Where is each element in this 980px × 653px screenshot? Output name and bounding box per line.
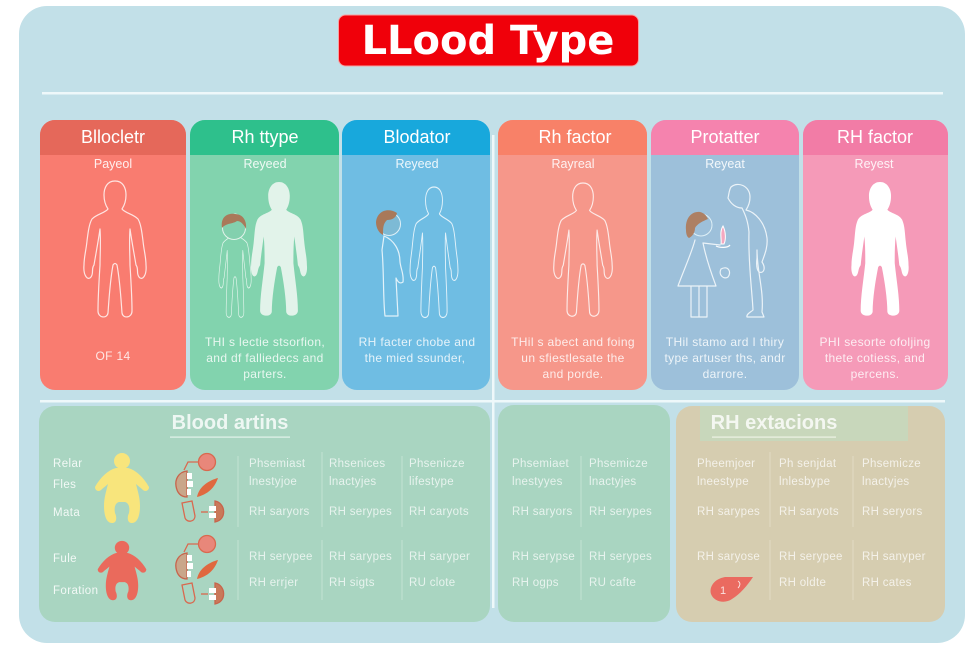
row labels: Foration xyxy=(53,585,98,597)
panel: Rh ttype card: Rh ttype xyxy=(231,127,299,147)
panel: RH factor card: Reyest xyxy=(855,157,894,171)
panel: RH factor card xyxy=(803,120,948,390)
panel: middle table xyxy=(498,405,670,622)
icon: man side view xyxy=(728,184,767,317)
icon: child figure xyxy=(219,214,251,317)
panel: RH factor card: percens. xyxy=(851,367,899,381)
panel: Rh factor card: un sfiestlesate the xyxy=(521,351,625,365)
icon: body outline xyxy=(554,183,612,316)
icon: girl holding flower xyxy=(678,212,730,317)
table text: lnactyjes xyxy=(329,476,376,488)
table text: RH sigts xyxy=(329,577,375,589)
panel: Blood artins xyxy=(39,406,490,622)
panel: middle table: RH serypse xyxy=(512,551,575,563)
panel: Rh factor card: THil s abect and foing xyxy=(511,335,635,349)
panel: Bllocletr card: OF 14 xyxy=(95,349,131,363)
panel: RH extacions: RH saryots xyxy=(779,506,839,518)
panel: Protatter card xyxy=(651,120,799,390)
table text: RU clote xyxy=(409,577,456,589)
panel: Rh ttype card: and df falliedecs and xyxy=(206,351,324,365)
table text: Rhsenices xyxy=(329,458,385,470)
table text: RH sarypes xyxy=(329,551,392,563)
panel: Rh factor card: and porde. xyxy=(543,367,603,381)
panel: RH extacions: lnactyjes xyxy=(862,476,909,488)
panel: RH extacions: RH cates xyxy=(862,577,912,589)
panel: middle table: RH ogps xyxy=(512,577,559,589)
table text: Phsemiast xyxy=(249,458,306,470)
panel: Bllocletr card: Payeol xyxy=(94,157,132,171)
panel: RH extacions: Ph senjdat xyxy=(779,458,837,470)
panel: RH extacions: RH sarypes xyxy=(697,506,760,518)
panel: middle table: RU cafte xyxy=(589,577,636,589)
panel: RH factor card: PHI sesorte ofoljing xyxy=(819,335,931,349)
panel: middle table: RH serypes xyxy=(589,551,652,563)
panel: Blodator card: Reyeed xyxy=(395,157,439,171)
table text xyxy=(249,458,470,589)
panel: Protatter card: Protatter xyxy=(690,127,760,147)
panel: Protatter card: Reyeat xyxy=(705,157,745,171)
icon: red baby xyxy=(98,541,146,600)
row labels: Mata xyxy=(53,507,80,519)
panel: Protatter card: darrore. xyxy=(703,367,747,381)
panel: Rh factor card xyxy=(498,120,647,390)
panel: middle table: RH saryors xyxy=(512,506,573,518)
panel: Rh factor card: Rh factor xyxy=(538,127,612,147)
panel: Rh ttype card: Reyeed xyxy=(243,157,287,171)
icon: child side view xyxy=(376,210,403,316)
panel: RH extacions: RH saryose xyxy=(697,551,760,563)
panel: Blodator card xyxy=(342,120,490,390)
icon: white silhouette xyxy=(851,182,909,316)
panel: RH extacions: RH extacions xyxy=(711,412,837,434)
panel: RH factor card: RH factor xyxy=(837,127,913,147)
table text: RH saryper xyxy=(409,551,470,563)
panel: RH factor card: thete cotiess, and xyxy=(825,351,925,365)
panel: RH extacions: lneestype xyxy=(697,476,749,488)
panel: Protatter card: THil stamo ard I thiry xyxy=(666,335,784,349)
icon: red drop: 1 xyxy=(720,585,726,597)
row labels: Fles xyxy=(53,479,76,491)
table text: RH errjer xyxy=(249,577,298,589)
panel: RH extacions: Phsemicze xyxy=(862,458,921,470)
table text: RH serypes xyxy=(329,506,392,518)
panel: Rh ttype card xyxy=(190,120,339,390)
row labels: Relar xyxy=(53,458,82,470)
panel: RH extacions: RH serypee xyxy=(779,551,843,563)
panel: Blodator card: the mied ssunder, xyxy=(365,351,465,365)
table text: lifestype xyxy=(409,476,454,488)
table text: Phsenicze xyxy=(409,458,465,470)
panel: RH extacions: Pheemjoer xyxy=(697,458,755,470)
panel: Blodator card: RH facter chobe and xyxy=(359,335,475,349)
panel: Bllocletr card xyxy=(40,120,186,390)
icon: adult silhouette xyxy=(251,182,307,316)
table text: RH serypee xyxy=(249,551,313,563)
panel: middle table: Phsemicze xyxy=(589,458,648,470)
icon: adult outline xyxy=(410,187,458,318)
icon: yellow baby xyxy=(95,453,149,523)
panel: RH extacions: RH seryors xyxy=(862,506,923,518)
panel: RH extacions: lnlesbype xyxy=(779,476,830,488)
icon: organs lower xyxy=(176,536,224,604)
title banner: LLood Type xyxy=(362,18,614,64)
row labels xyxy=(53,458,98,597)
panel: Bllocletr card: Bllocletr xyxy=(81,127,145,147)
panel: middle table: lnestyyes xyxy=(512,476,563,488)
icon: organs upper xyxy=(176,454,224,522)
panel: Blodator card: Blodator xyxy=(383,127,451,147)
panel: Rh ttype card: parters. xyxy=(243,367,287,381)
panel: RH extacions xyxy=(676,406,945,622)
table text: lnestyjoe xyxy=(249,476,297,488)
table text: RH caryots xyxy=(409,506,469,518)
panel: Rh ttype card: THI s lectie stsorfion, xyxy=(205,335,325,349)
icon: red drop xyxy=(711,577,753,602)
panel: RH extacions: RH oldte xyxy=(779,577,826,589)
panel: Protatter card: type artuser ths, andr xyxy=(664,351,786,365)
panel: middle table: lnactyjes xyxy=(589,476,636,488)
icon: body outline xyxy=(84,181,146,317)
table text: RH saryors xyxy=(249,506,310,518)
icon: small apple xyxy=(720,268,730,278)
panel: middle table: RH serypes xyxy=(589,506,652,518)
row labels: Fule xyxy=(53,553,77,565)
panel: middle table: Phsemiaet xyxy=(512,458,570,470)
panel: Blood artins: Blood artins xyxy=(172,412,288,434)
panel: RH extacions: RH sanyper xyxy=(862,551,926,563)
panel: Rh factor card: Rayreal xyxy=(551,157,595,171)
